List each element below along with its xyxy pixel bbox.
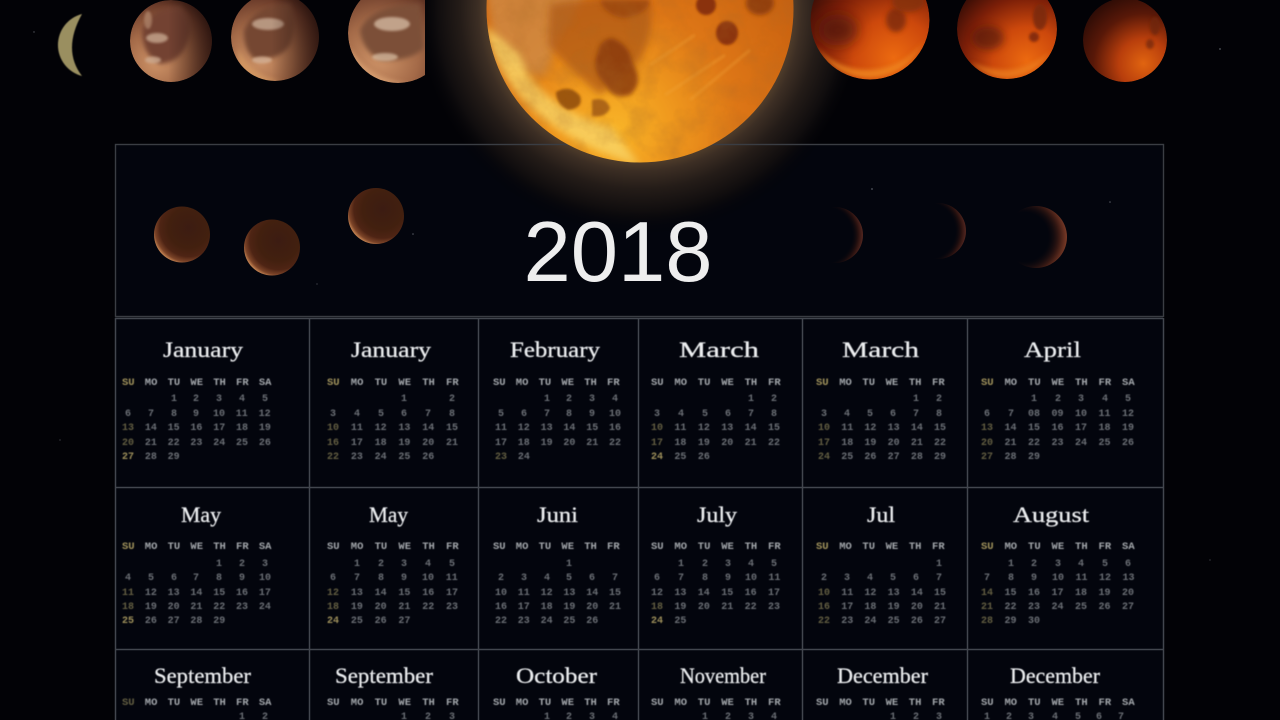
dates: 345678 <box>821 409 942 420</box>
weekday header: SU MO TU WE TH FR <box>327 377 459 389</box>
panel: May (second) <box>327 502 459 627</box>
dates: 56789 <box>498 409 595 420</box>
dates: 12 <box>913 394 942 405</box>
dates: 27 28 29 <box>981 452 1040 463</box>
dates: 12345 <box>171 394 268 405</box>
dates: 10 11 <box>422 573 458 584</box>
month title: February <box>510 337 600 362</box>
icon: dim moon left 2 <box>244 220 300 276</box>
dates: 10 11 12 13 14 15 <box>651 423 780 434</box>
icon: crescent moon <box>58 14 82 76</box>
month title: January <box>351 337 431 362</box>
month title: September <box>335 663 434 688</box>
dates: 10 11 12 13 14 15 <box>818 588 946 599</box>
panel: September <box>122 663 272 720</box>
icon: dim moon right 1 <box>807 207 863 263</box>
glow around central moon <box>415 0 865 234</box>
panel: calendar background <box>115 144 1163 720</box>
dates <box>122 394 271 463</box>
icon: dim moon left 3 <box>348 188 404 244</box>
heading: year: 2018 <box>523 205 713 300</box>
dates: 21 22 23 24 25 26 27 <box>981 602 1134 613</box>
month title: January <box>163 337 243 362</box>
icon: dim moon right 2 <box>910 203 966 259</box>
dates: 24 25 <box>651 616 686 627</box>
dates <box>651 559 780 627</box>
dates <box>327 394 458 463</box>
weekday header: SU MO TU WE TH FR <box>816 697 945 709</box>
icon: dim moon right 3 <box>1005 206 1067 268</box>
month title: November <box>680 663 767 688</box>
month title: December <box>837 663 929 688</box>
weekday header: SU MO TU WE TH FR <box>651 697 781 709</box>
icon: waxing moon 4 <box>348 0 425 83</box>
dates: 10 <box>259 573 271 584</box>
dates: 456789 <box>125 573 245 584</box>
icon: dim moon left 1 <box>154 206 210 262</box>
month title: Jul <box>867 502 895 527</box>
weekday header: SU MO TU WE TH FR SA <box>122 541 272 553</box>
dates: 10 <box>609 409 621 420</box>
dates: 10 11 12 13 <box>1052 573 1135 584</box>
weekday header: SU MO TU WE TH FR <box>493 697 620 709</box>
month title: March <box>679 337 759 362</box>
panel: March (second) <box>816 337 946 463</box>
dates: 12 <box>748 394 777 405</box>
weekday header: SU MO TU WE TH FR SA <box>122 377 272 389</box>
dates: 18 19 20 21 22 23 24 <box>122 602 271 613</box>
icon: red moon C <box>1083 0 1167 82</box>
weekday header: SU MO TU WE TH FR <box>327 697 459 709</box>
dates <box>651 394 780 463</box>
dates: 234567 <box>821 573 942 584</box>
dates: 10 11 12 13 14 15 <box>495 588 621 599</box>
weekday header: SU MO TU WE TH FR SA <box>122 697 272 709</box>
dates <box>981 394 1134 463</box>
dates <box>495 394 621 463</box>
weekday header: SU MO TU WE TH FR <box>327 541 459 553</box>
panel: December (second) <box>981 663 1135 720</box>
panel: May <box>122 502 272 627</box>
dates: 22 23 24 25 26 <box>495 616 598 627</box>
month title: May <box>181 502 221 527</box>
panel: April <box>981 337 1135 463</box>
dates: 16 17 18 19 20 21 <box>327 438 458 449</box>
dates: 28 29 30 <box>981 616 1040 627</box>
icon: waxing moon 3 <box>231 0 321 84</box>
dates: 12 <box>401 394 455 405</box>
month title: October <box>516 663 598 688</box>
panel: year header box <box>116 144 1164 316</box>
dates: 6789 <box>654 573 731 584</box>
panel: February <box>493 337 621 463</box>
panel: March <box>651 337 781 463</box>
dates: 24 25 26 27 28 29 <box>818 452 946 463</box>
dates: 234567 <box>498 573 618 584</box>
dates: 18 19 20 21 22 23 <box>327 602 458 613</box>
panel: October <box>493 663 620 720</box>
dates: 789 <box>984 573 1037 584</box>
month title: September <box>154 663 252 688</box>
dates: 10 11 12 13 14 15 <box>327 423 458 434</box>
dates: 6789 <box>330 573 407 584</box>
icon: waxing moon 2 <box>130 0 215 85</box>
panel: July (second) <box>816 502 946 627</box>
panel: June <box>493 502 621 627</box>
dates: 6789 <box>125 409 199 420</box>
dates: 24 25 26 <box>651 452 710 463</box>
dates: 14 15 16 17 18 19 20 <box>981 588 1134 599</box>
month title: August <box>1013 502 1089 527</box>
month title: December <box>1010 663 1101 688</box>
dates: 11 12 13 14 15 16 17 <box>122 588 271 599</box>
calendar grid lines <box>115 318 1164 720</box>
panel: July <box>651 502 781 627</box>
dates: 13 14 15 16 17 18 19 <box>122 423 271 434</box>
dates: 16 17 18 19 20 21 <box>818 602 946 613</box>
panel: January (second) <box>327 337 459 463</box>
weekday header: SU MO TU WE TH FR <box>651 377 781 389</box>
dates: 1 <box>936 559 942 570</box>
month title: Juni <box>537 502 578 527</box>
dates: 27 28 29 <box>122 452 180 463</box>
dates: 12345 <box>354 559 455 570</box>
dates: 17 18 19 20 21 22 <box>818 438 946 449</box>
dates: 345678 <box>330 409 455 420</box>
dates: 11 12 13 14 15 16 <box>495 423 621 434</box>
dates: 08 09 10 11 12 <box>1028 409 1134 420</box>
dates: 22 23 24 25 26 27 <box>818 616 946 627</box>
weekday header: SU MO TU WE TH FR <box>816 541 945 553</box>
dates: 13 14 15 16 17 18 19 <box>981 423 1134 434</box>
dates <box>327 559 458 627</box>
weekday header: SU MO TU WE TH FR <box>493 377 620 389</box>
dates: 10 11 <box>745 573 780 584</box>
dates: 123456 <box>1008 559 1131 570</box>
dates <box>495 559 621 627</box>
dates: 12345 <box>678 559 777 570</box>
dates: 24 25 26 27 <box>327 616 410 627</box>
dates: 67 <box>984 409 1014 420</box>
panel: December <box>816 663 945 720</box>
stars <box>33 31 1221 561</box>
dates: 10 11 12 <box>213 409 271 420</box>
dates: 17 18 19 20 21 22 <box>651 438 780 449</box>
dates: 22 23 24 25 26 <box>327 452 434 463</box>
dates <box>981 559 1135 627</box>
dates: 17 18 19 20 21 22 <box>495 438 621 449</box>
panel: September (second) <box>327 663 459 720</box>
dates: 16 17 18 19 20 21 <box>495 602 621 613</box>
panel: November <box>651 663 781 720</box>
dates: 23 24 <box>495 452 530 463</box>
weekday header: SU MO TU WE TH FR <box>493 541 620 553</box>
panel: August <box>981 502 1135 627</box>
icon: central blood moon <box>484 0 796 166</box>
month title: March <box>842 337 919 362</box>
dates: 123 <box>216 559 268 570</box>
dates: 12345 <box>1031 394 1131 405</box>
month title: April <box>1024 337 1081 362</box>
dates <box>818 394 946 463</box>
weekday header: SU MO TU WE TH FR SA <box>981 377 1135 389</box>
weekday header: SU MO TU WE TH FR SA <box>981 697 1135 709</box>
month title: May <box>369 502 408 527</box>
dates: 18 19 20 21 22 23 <box>651 602 780 613</box>
weekday header: SU MO TU WE TH FR SA <box>981 541 1135 553</box>
dates: 20 21 22 23 24 25 26 <box>981 438 1134 449</box>
dates: 12 13 14 15 16 17 <box>327 588 458 599</box>
dates: 25 26 27 28 29 <box>122 616 225 627</box>
weekday header: SU MO TU WE TH FR <box>651 541 781 553</box>
dates: 1234 <box>544 394 618 405</box>
panel: January <box>122 337 272 463</box>
dates <box>122 559 271 627</box>
icon: red moon A <box>810 0 930 80</box>
dates: 20 21 22 23 24 25 26 <box>122 438 271 449</box>
dates <box>818 559 946 627</box>
dates: 12 13 14 15 16 17 <box>651 588 780 599</box>
dates: 345678 <box>654 409 777 420</box>
dates: 1 <box>566 559 572 570</box>
dates: 10 11 12 13 14 15 <box>818 423 946 434</box>
month title: July <box>697 502 737 527</box>
weekday header: SU MO TU WE TH FR <box>816 377 945 389</box>
icon: red moon B <box>957 0 1057 79</box>
